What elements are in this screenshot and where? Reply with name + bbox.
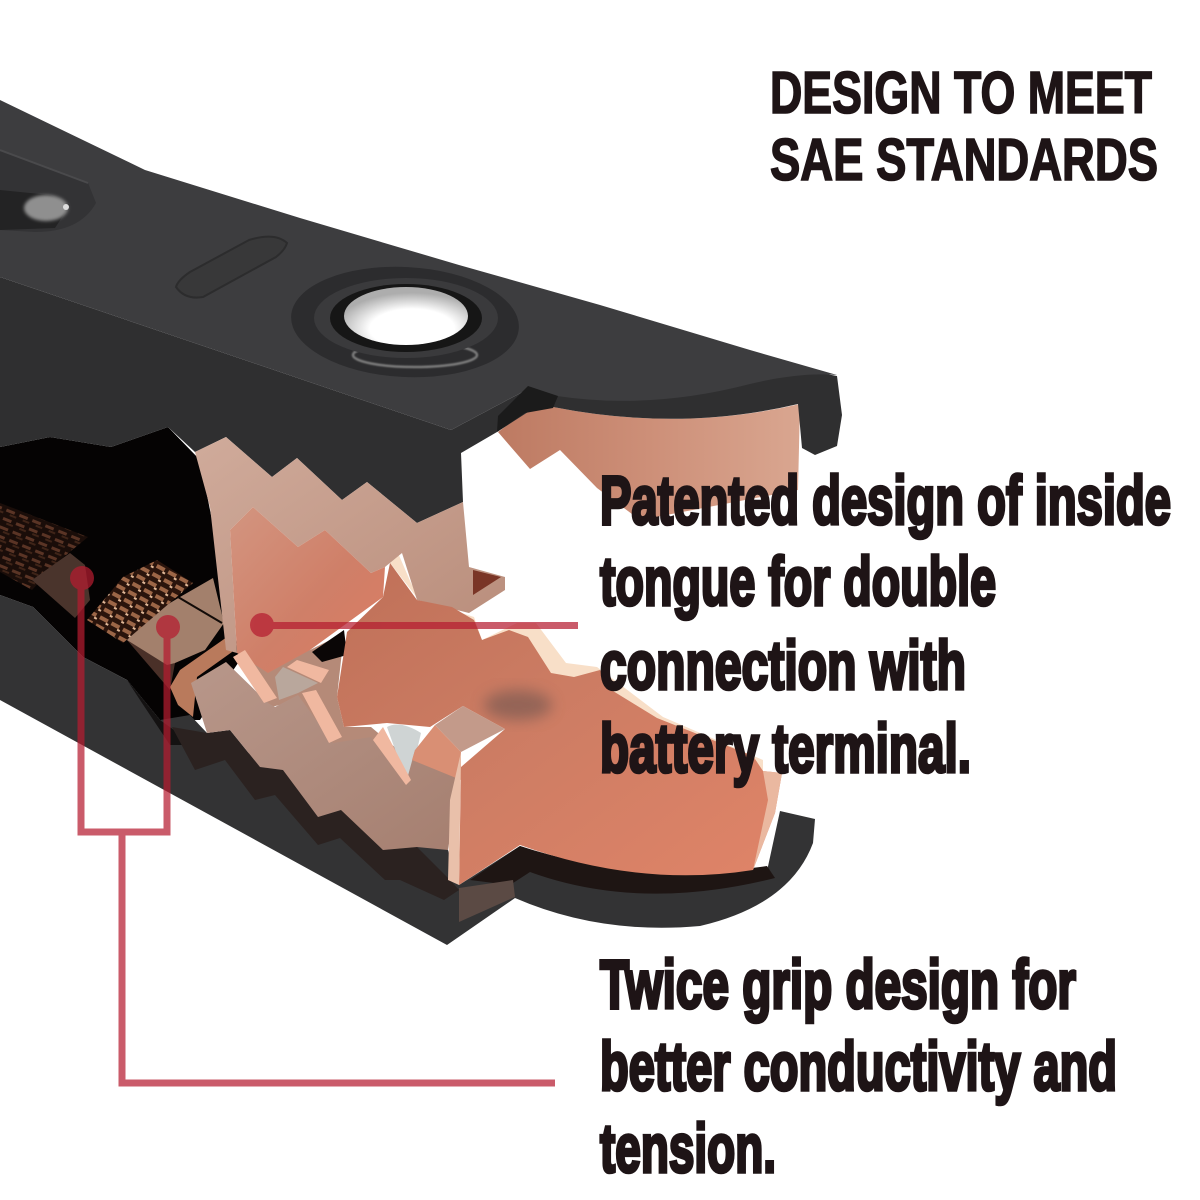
black clamp interior (0, 427, 240, 720)
text block: patented tongue: battery terminal. (600, 710, 971, 787)
upper clamp top face (0, 100, 837, 430)
first rivet (0, 150, 96, 232)
lower tan teeth (191, 662, 461, 850)
text block: patented tongue (600, 462, 1171, 787)
text block: patented tongue: tongue for double (600, 543, 996, 620)
dark notch inside jaw (473, 570, 501, 595)
text block: twice grip: tension. (600, 1110, 776, 1187)
lower jaw rivet (387, 725, 421, 780)
disc side strip (753, 771, 782, 870)
heading (770, 60, 1158, 193)
metal patch (275, 667, 318, 700)
text block: twice grip (600, 946, 1117, 1187)
lower clamp plate (0, 595, 815, 945)
front tab (435, 706, 505, 752)
lower far cream edge (390, 553, 763, 775)
disc edge strip (448, 752, 461, 885)
callout leader: twice grip (70, 566, 555, 1083)
lower jaw arc shadow (470, 846, 775, 894)
upper clamp side (0, 277, 842, 523)
inner tongue (230, 507, 385, 673)
disc shadow (484, 690, 552, 720)
lower copper disc (337, 563, 782, 885)
metal backing behind lower teeth (245, 633, 410, 760)
rim highlight (497, 386, 558, 432)
upper jaw tan side (195, 437, 505, 653)
second rivet (288, 261, 522, 383)
copper wires (0, 503, 232, 717)
far copper jaw (498, 404, 800, 520)
black strip above lower plate (127, 680, 195, 745)
slot emboss (176, 237, 287, 298)
text block: patented tongue: connection with (600, 627, 966, 704)
black opening (312, 630, 347, 662)
battery clamp illustration (0, 100, 842, 945)
callout leader: tongue (250, 613, 578, 637)
front end brown strip (459, 880, 515, 922)
tooth facets (233, 650, 411, 785)
lower tooth shadows (172, 727, 459, 900)
